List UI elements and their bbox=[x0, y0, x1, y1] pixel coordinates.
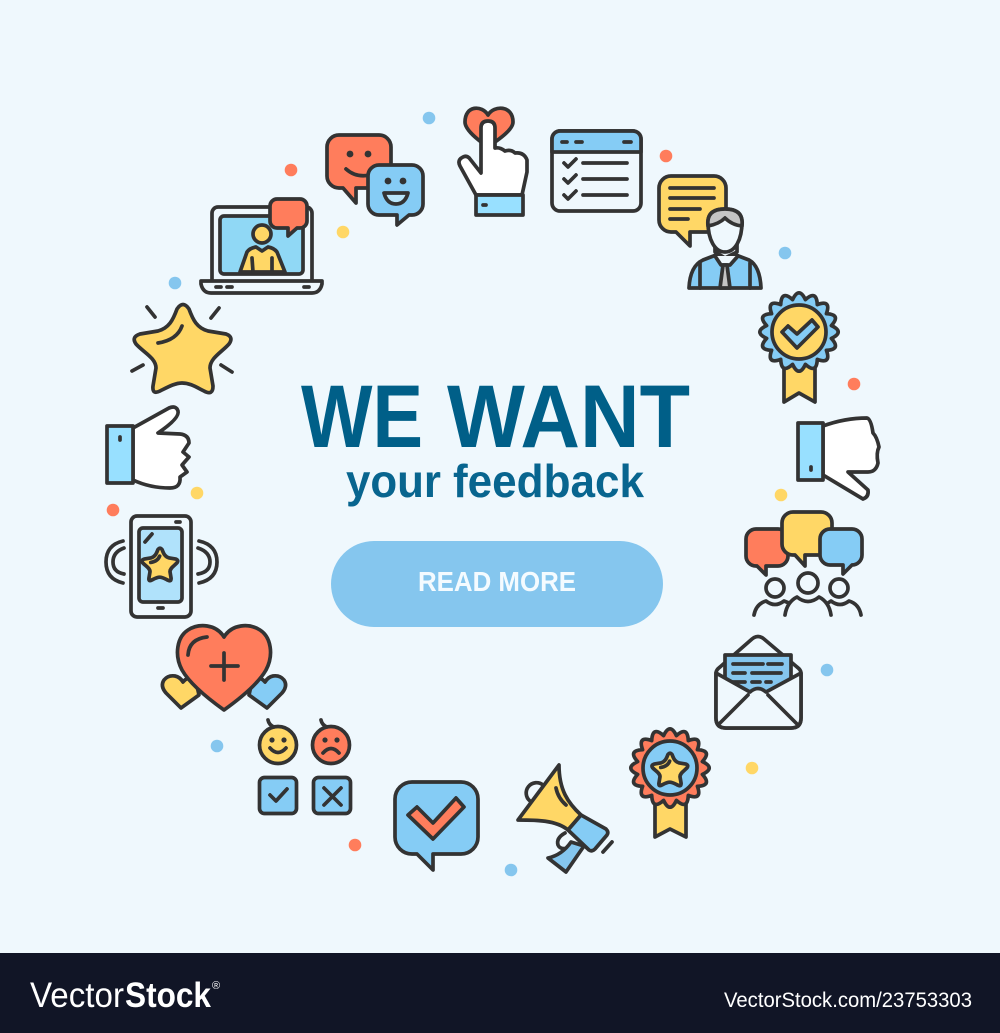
title bbox=[301, 366, 690, 466]
icon: smiley and sad face with check boxes bbox=[260, 720, 350, 814]
icon: megaphone bbox=[518, 765, 612, 872]
icon: check badge rosette bbox=[760, 293, 838, 402]
subtitle: your bbox=[346, 455, 441, 507]
icon: open envelope bbox=[716, 636, 801, 728]
title: WANT bbox=[447, 366, 690, 466]
title: WE bbox=[301, 366, 423, 466]
footer bar: Vector bbox=[30, 976, 124, 1015]
button: read more bbox=[331, 541, 663, 627]
footer bar: VectorStock.com/23753303 bbox=[724, 989, 972, 1012]
icon: checklist window bbox=[552, 131, 641, 211]
icon: speech bubble with check bbox=[395, 782, 478, 870]
icon: hearts with plus bbox=[162, 626, 286, 710]
icon: smiling chat bubbles bbox=[327, 135, 423, 225]
icon: shining star bbox=[132, 304, 232, 393]
icon: phone with star bbox=[106, 516, 217, 617]
decorative dots ring bbox=[107, 112, 860, 876]
footer bar bbox=[0, 953, 1000, 1033]
footer bar: Stock bbox=[125, 976, 211, 1015]
icon: laptop with person bbox=[201, 199, 322, 293]
button: read more: READ MORE bbox=[418, 566, 576, 597]
subtitle bbox=[346, 455, 644, 507]
icon: star rosette bbox=[631, 729, 709, 837]
footer bar: ® bbox=[212, 980, 220, 992]
icon: person with speech bubble bbox=[659, 176, 761, 288]
icon: thumbs up bbox=[107, 407, 189, 488]
icon: group with speech bubbles bbox=[746, 512, 862, 615]
subtitle: feedback bbox=[453, 455, 644, 507]
icon: thumbs down bbox=[798, 418, 879, 499]
icon: hand pressing heart bbox=[459, 108, 527, 215]
